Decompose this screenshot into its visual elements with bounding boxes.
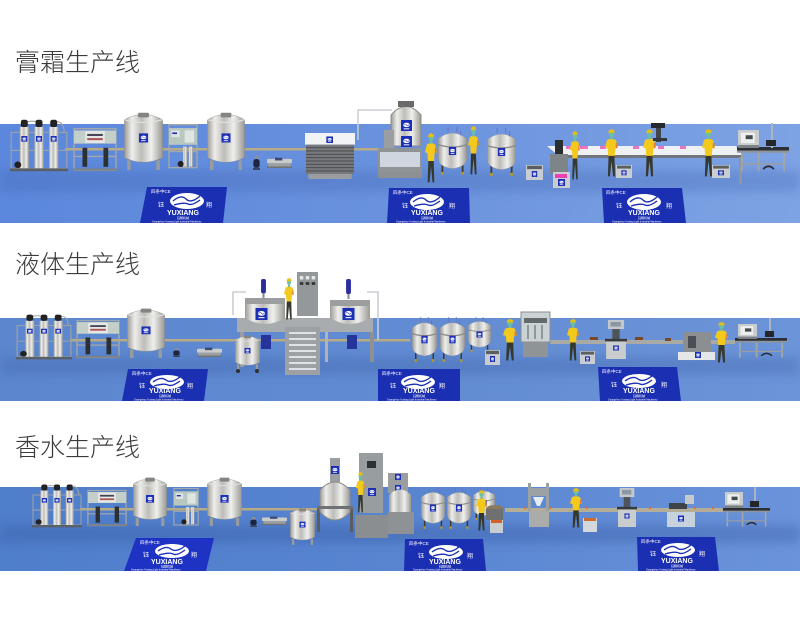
icon: mixing unit xyxy=(358,101,422,178)
sign: 翔 xyxy=(661,381,667,389)
icon: capping machine xyxy=(617,488,637,527)
sign: Guangzhou Yuxiang Light Industrial Machinery xyxy=(131,569,181,572)
icon: tank xyxy=(447,487,471,529)
icon: tank xyxy=(440,317,465,362)
sign: YUXIANG xyxy=(661,558,693,565)
icon: UV steriliser xyxy=(267,158,292,168)
icon: coder stand xyxy=(750,487,759,507)
icon: worker xyxy=(356,472,365,512)
icon: UV steriliser xyxy=(197,348,222,357)
icon: table xyxy=(723,508,770,526)
sign: Guangzhou Yuxiang Light Industrial Machinery xyxy=(387,399,437,402)
icon: RO unit xyxy=(76,321,120,358)
panel: perfume production line xyxy=(0,453,800,572)
icon: worker xyxy=(425,133,437,182)
icon: mixing pan left xyxy=(245,298,285,324)
icon: worker xyxy=(643,129,656,176)
icon: worker xyxy=(570,131,580,179)
icon: box xyxy=(580,351,595,364)
icon: storage tank 2 xyxy=(207,478,242,526)
icon: labeller xyxy=(678,332,715,360)
sign: Guangzhou Yuxiang Light Industrial Machinery xyxy=(152,221,202,224)
icon: worker xyxy=(468,126,479,174)
sign: 翔 xyxy=(666,202,672,210)
icon: pump xyxy=(253,155,260,170)
sign: 翔 xyxy=(439,382,445,390)
icon: control panel xyxy=(297,272,318,316)
sign: 翔 xyxy=(187,382,193,390)
sign: 四条中CE xyxy=(382,370,402,377)
icon: filling machine xyxy=(528,483,549,527)
icon: worker xyxy=(284,278,294,319)
sign: Guangzhou Yuxiang Light Industrial Machinery xyxy=(646,569,696,572)
icon: control box xyxy=(738,324,757,339)
sign: 钰 xyxy=(402,202,408,210)
icon: table xyxy=(735,338,787,357)
sign: Guangzhou Yuxiang Light Industrial Machinery xyxy=(608,399,658,402)
sign: 钰翔机械 xyxy=(159,393,171,398)
sign xyxy=(637,537,719,572)
sign xyxy=(387,188,470,224)
sign: YUXIANG xyxy=(429,559,461,566)
icon: homogenizer xyxy=(317,458,353,532)
pipe xyxy=(80,508,320,510)
icon: RO unit xyxy=(87,490,127,526)
sign: 翔 xyxy=(206,201,212,209)
icon: motor xyxy=(346,279,351,299)
icon: filling pump box xyxy=(526,165,543,180)
sign: 四条中CE xyxy=(140,539,160,546)
sign: 翔 xyxy=(449,202,455,210)
conveyor xyxy=(550,337,735,344)
sign: 四条中CE xyxy=(606,189,626,196)
sign: 四条中CE xyxy=(151,188,171,195)
pipe xyxy=(70,339,410,342)
pipe xyxy=(65,148,385,150)
icon: pump xyxy=(173,348,180,357)
sign: Guangzhou Yuxiang Light Industrial Machinery xyxy=(396,221,446,224)
sign: YUXIANG xyxy=(167,210,199,217)
icon: tank xyxy=(468,317,491,352)
icon: storage tank 2 xyxy=(207,113,245,170)
sign: 钰 xyxy=(390,382,396,390)
icon: stamping machine xyxy=(651,123,667,142)
icon: tank xyxy=(421,487,445,529)
sign: 钰翔机械 xyxy=(177,215,189,220)
icon: coding table xyxy=(737,147,789,171)
icon: worker xyxy=(567,319,579,360)
icon: worker xyxy=(503,319,517,360)
icon: control panel xyxy=(359,453,383,513)
icon: sealing machine xyxy=(667,495,695,527)
sign: Guangzhou Yuxiang Light Industrial Machinery xyxy=(612,221,662,224)
sign: 钰翔机械 xyxy=(421,215,433,220)
sign: 钰 xyxy=(143,551,149,559)
icon: worker xyxy=(570,488,582,527)
sign: 钰 xyxy=(616,202,622,210)
icon: storage tank xyxy=(124,113,163,170)
icon: portable tank xyxy=(235,335,260,373)
icon: filling head xyxy=(550,140,570,188)
icon: coder stand xyxy=(766,123,776,148)
icon: coder stand xyxy=(765,318,774,337)
icon: filling machine xyxy=(521,312,550,357)
sign xyxy=(140,187,227,224)
icon: small RO unit xyxy=(169,125,197,168)
icon: box xyxy=(583,518,597,532)
icon: platform xyxy=(355,515,388,538)
sign: YUXIANG xyxy=(403,388,435,395)
sign xyxy=(124,538,214,572)
icon: tank xyxy=(473,487,495,520)
sign: 钰翔机械 xyxy=(413,393,425,398)
icon: control box xyxy=(725,492,743,508)
sign: 四条中CE xyxy=(641,538,661,545)
icon: control box xyxy=(738,130,759,148)
conveyor xyxy=(547,146,743,184)
icon: worker xyxy=(605,129,618,176)
icon: tank xyxy=(412,317,437,362)
icon: mixing pan right xyxy=(330,300,370,324)
icon: RO unit xyxy=(73,129,117,171)
sign: YUXIANG xyxy=(149,388,181,395)
sign xyxy=(602,188,686,224)
icon: portable tank xyxy=(290,508,315,545)
sign: 钰 xyxy=(139,382,145,390)
sign: YUXIANG xyxy=(623,388,655,395)
sign xyxy=(378,369,460,402)
icon: mixing platform xyxy=(233,292,378,367)
icon: stairs xyxy=(285,327,320,375)
conveyor xyxy=(505,507,723,512)
sign: 钰翔机械 xyxy=(638,215,650,220)
icon: storage tank xyxy=(127,309,165,358)
icon: box xyxy=(616,165,632,178)
panel: cream production line xyxy=(0,101,800,224)
sign: 钰翔机械 xyxy=(439,564,451,568)
icon: filter rack xyxy=(32,484,82,527)
icon: box xyxy=(485,350,500,365)
sign: 翔 xyxy=(467,552,473,560)
sign: 钰 xyxy=(418,552,424,560)
sign: 翔 xyxy=(699,550,705,558)
sign: 四条中CE xyxy=(409,540,429,547)
icon: worker xyxy=(702,129,715,176)
icon: homogenizer 2 xyxy=(388,473,414,534)
icon: capping machine xyxy=(605,320,627,359)
sign: 钰翔机械 xyxy=(633,393,645,398)
sign: 四条中CE xyxy=(602,368,622,375)
panel: liquid production line xyxy=(0,272,800,402)
sign: YUXIANG xyxy=(411,210,443,217)
sign: Guangzhou Yuxiang Light Industrial Machinery xyxy=(134,399,184,402)
sign: 钰 xyxy=(650,550,656,558)
icon: jacketed tank xyxy=(487,128,516,176)
title: cream line: 膏霜生产线 xyxy=(15,49,140,77)
icon: filter rack xyxy=(10,120,68,171)
sign xyxy=(122,369,208,402)
sign: 钰翔机械 xyxy=(161,564,173,568)
title: liquid line: 液体生产线 xyxy=(15,251,140,279)
icon: box xyxy=(712,165,730,178)
sign: YUXIANG xyxy=(151,559,183,566)
sign xyxy=(404,539,486,572)
sign: Guangzhou Yuxiang Light Industrial Machinery xyxy=(413,569,463,572)
icon: chiller xyxy=(305,133,355,179)
icon: storage tank xyxy=(133,478,167,526)
sign: 四条中CE xyxy=(132,370,152,377)
icon: pump xyxy=(250,517,257,527)
sign: 四条中CE xyxy=(393,189,413,196)
icon: small RO unit xyxy=(174,488,198,525)
sign: 钰 xyxy=(611,381,617,389)
title: perfume line: 香水生产线 xyxy=(15,434,140,462)
sign: 翔 xyxy=(191,551,197,559)
icon: hopper and box xyxy=(486,505,504,533)
icon: UV steriliser xyxy=(262,517,287,525)
sign xyxy=(598,367,681,402)
sign: 钰翔机械 xyxy=(671,563,683,568)
icon: worker xyxy=(476,490,487,530)
icon: motor xyxy=(261,279,266,298)
icon: worker xyxy=(715,322,728,362)
sign: YUXIANG xyxy=(628,210,660,217)
sign: 钰 xyxy=(158,201,164,209)
icon: filter rack xyxy=(16,315,72,359)
icon: jacketed tank xyxy=(438,127,467,175)
